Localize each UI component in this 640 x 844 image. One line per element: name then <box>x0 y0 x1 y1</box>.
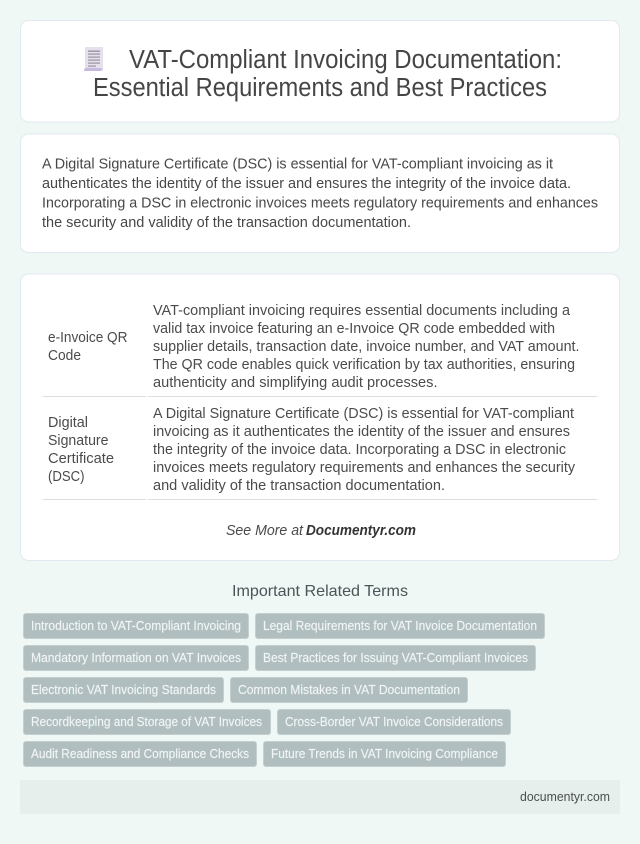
tag: Cross-Border VAT Invoice Considerations <box>285 715 503 729</box>
table row: Digital Signature Certificate: and validity of the transaction documentation. <box>153 478 445 494</box>
heading: related terms: Important Related Terms <box>232 583 408 600</box>
tag: Best Practices for Issuing VAT-Compliant Invoices <box>263 651 528 665</box>
footer <box>20 780 620 814</box>
table row: Digital Signature Certificate: Certificate <box>48 451 114 467</box>
see more link: See More at <box>226 523 304 539</box>
table row: Digital Signature Certificate: invoicing as it authenticates the identity of the issuer and ensures <box>153 424 570 440</box>
details panel <box>20 274 620 560</box>
tag: Mandatory Information on VAT Invoices <box>31 651 241 665</box>
table row: Digital Signature Certificate: A Digital Signature Certificate (DSC) is essential for VAT-compliant <box>153 406 574 422</box>
tag <box>24 646 248 670</box>
table row: e-Invoice QR Code <box>43 303 597 397</box>
title text: VAT-Compliant Invoicing Documentation: <box>129 46 562 74</box>
tag <box>24 710 270 734</box>
see more link: Documentyr.com <box>306 523 416 539</box>
icon: invoice scroll <box>84 47 103 71</box>
intro paragraph: authenticates the identity of the issuer and ensures the integrity of the invoice data. <box>42 175 571 192</box>
tag: Legal Requirements for VAT Invoice Documentation <box>263 619 537 633</box>
table row: e-Invoice QR Code: Code <box>48 348 81 364</box>
tag <box>24 614 248 638</box>
related term tags <box>24 614 544 766</box>
tag: Introduction to VAT-Compliant Invoicing <box>31 619 241 633</box>
intro paragraph: Incorporating a DSC in electronic invoices meets regulatory requirements and enhances <box>42 194 598 211</box>
tag: Recordkeeping and Storage of VAT Invoices <box>31 715 262 729</box>
intro paragraph: the security and validity of the transaction documentation. <box>42 214 411 231</box>
table row: e-Invoice QR Code: e-Invoice QR <box>48 330 128 346</box>
tag: Common Mistakes in VAT Documentation <box>238 683 460 697</box>
footer: documentyr.com <box>520 789 610 804</box>
intro paragraph: A Digital Signature Certificate (DSC) is essential for VAT-compliant invoicing as it <box>42 155 554 172</box>
tag <box>278 710 510 734</box>
tag <box>24 678 224 702</box>
tag: Electronic VAT Invoicing Standards <box>31 683 216 697</box>
tag <box>230 678 468 702</box>
table row: e-Invoice QR Code: authenticity and simplifying audit processes. <box>153 375 437 391</box>
tag <box>24 742 256 766</box>
tag: Audit Readiness and Compliance Checks <box>31 747 249 761</box>
table row: Digital Signature Certificate: (DSC) <box>48 469 84 485</box>
intro panel <box>20 134 620 252</box>
tag <box>256 646 536 670</box>
table row: e-Invoice QR Code: supplier details, transaction date, invoice number, and VAT amount. <box>153 339 580 355</box>
table row: e-Invoice QR Code: VAT-compliant invoicing requires essential documents including a <box>153 303 570 319</box>
table row: Digital Signature Certificate <box>43 406 597 500</box>
tag: Future Trends in VAT Invoicing Compliance <box>271 747 498 761</box>
tag <box>264 742 506 766</box>
table row: e-Invoice QR Code: valid tax invoice featuring an e-Invoice QR code embedded with <box>153 321 555 337</box>
table row: Digital Signature Certificate: Digital <box>48 415 88 431</box>
title text: Essential Requirements and Best Practices <box>93 74 547 102</box>
title panel <box>20 20 620 122</box>
table row: Digital Signature Certificate: invoices meets regulatory requirements and enhances the security <box>153 460 576 476</box>
tag <box>256 614 544 638</box>
table row: e-Invoice QR Code: The QR code enables quick verification by tax authorities, ensuring <box>153 357 575 373</box>
table row: Digital Signature Certificate: the integrity of the invoice data. Incorporating a DSC in electronic <box>153 442 566 458</box>
table row: Digital Signature Certificate: Signature <box>48 433 109 449</box>
